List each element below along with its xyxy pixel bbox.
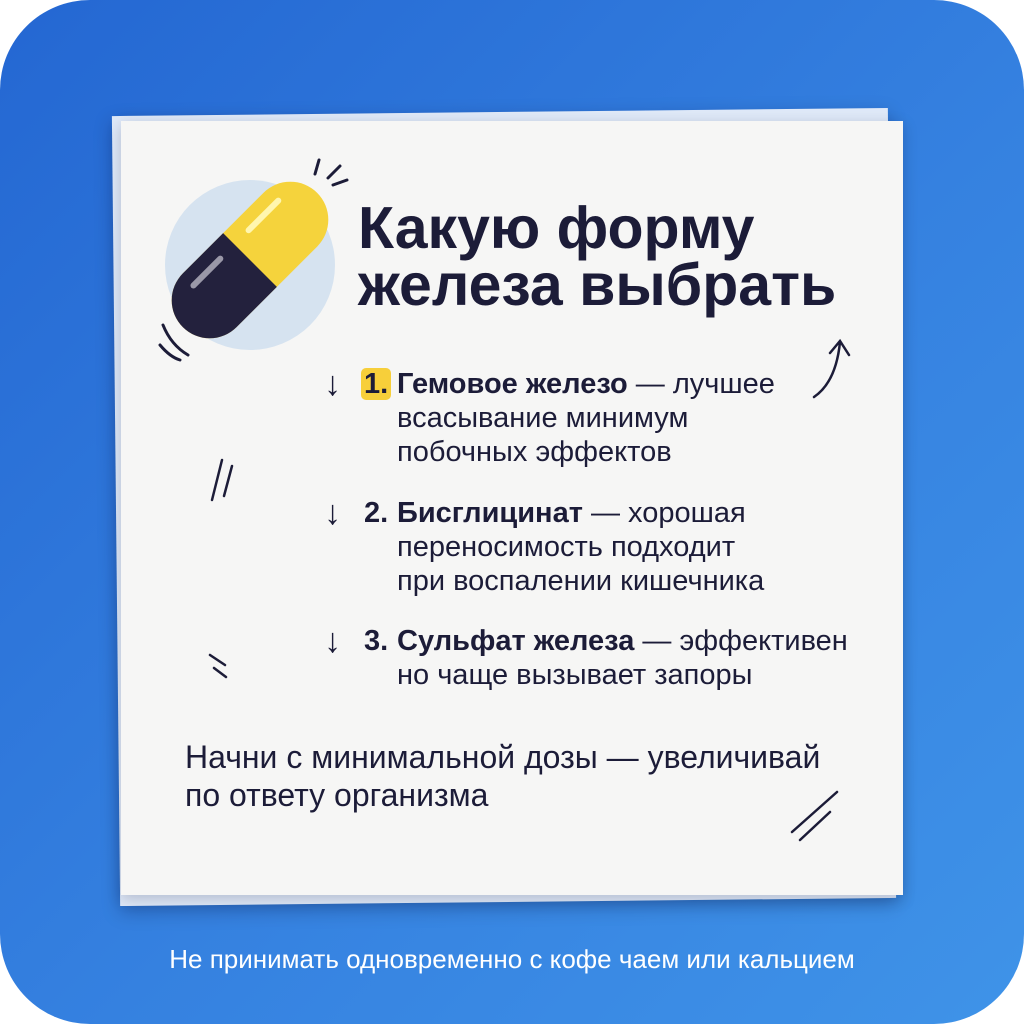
card xyxy=(121,121,903,895)
text: Сульфат железа — эффективен xyxy=(397,625,848,657)
text: но чаще вызывает запоры xyxy=(397,659,752,691)
text: ↓ xyxy=(324,494,341,532)
item 2 xyxy=(324,494,764,597)
item 3 xyxy=(324,622,848,691)
text: ↓ xyxy=(324,622,341,660)
text: побочных эффектов xyxy=(397,436,672,468)
text: ↓ xyxy=(324,365,341,403)
text: всасывание минимум xyxy=(397,402,688,434)
title xyxy=(358,195,836,318)
text: Бисглицинат — хорошая xyxy=(397,497,746,529)
text: переносимость подходит xyxy=(397,531,735,563)
icon: pill xyxy=(158,158,348,362)
footer text xyxy=(185,739,820,813)
bottom note: Не принимать одновременно с кофе чаем или кальцием xyxy=(169,944,855,974)
title: железа выбрать xyxy=(358,252,836,318)
title: Какую форму xyxy=(358,195,754,261)
text: 2. xyxy=(364,497,388,529)
text: 3. xyxy=(364,625,388,657)
text: 1. xyxy=(364,368,388,400)
back sheet xyxy=(112,108,896,906)
text: при воспалении кишечника xyxy=(397,565,764,597)
text: Гемовое железо — лучшее xyxy=(397,368,775,400)
footer text: Начни с минимальной дозы — увеличивай xyxy=(185,739,820,775)
decorative arrow up xyxy=(812,338,850,398)
footer text: по ответу организма xyxy=(185,777,488,813)
item 1 xyxy=(324,365,775,468)
